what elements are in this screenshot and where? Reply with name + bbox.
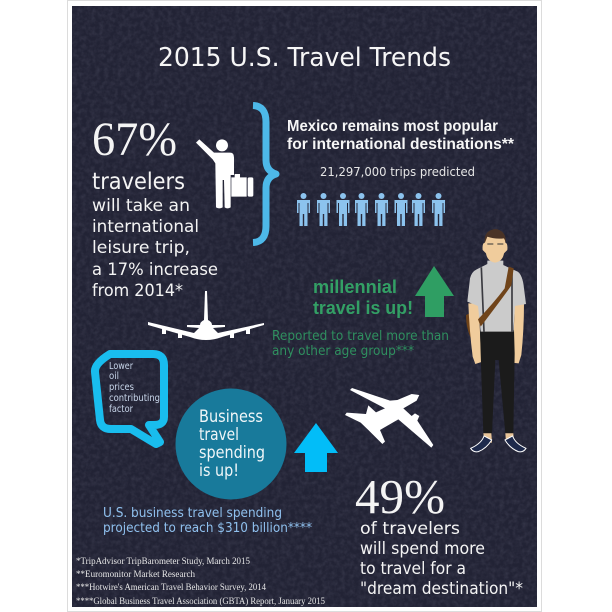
- bubble text: oil: [109, 371, 119, 382]
- footnotes: ****Global Business Travel Association (GBTA) Report, January 2015: [76, 596, 325, 607]
- footnotes: [76, 557, 325, 607]
- icon: traveler with suitcase: [196, 139, 253, 208]
- heading: Mexico: [287, 118, 515, 153]
- stat block: 49% of travelers: [355, 469, 523, 598]
- heading: Mexico: for international destinations**: [287, 136, 515, 153]
- heading: Mexico: Mexico remains most popular: [287, 118, 498, 135]
- stat block: 67% travelers: 67%: [92, 113, 177, 166]
- heading: millennial travel: travel is up!: [313, 298, 413, 318]
- stat block: 49% of travelers: of travelers: [360, 519, 460, 538]
- bubble text: prices: [109, 382, 134, 393]
- circle: business travel: is up!: [199, 461, 239, 481]
- circle: business travel: travel: [199, 425, 239, 445]
- stat block: 49% of travelers: will spend more: [360, 539, 485, 558]
- stat block: 67% travelers: international: [92, 217, 199, 237]
- stat block: 49% of travelers: to travel for a: [360, 559, 466, 578]
- footnotes: **Euromonitor Market Research: [76, 570, 195, 580]
- brace: [253, 106, 276, 242]
- icon: airplane front view: [148, 291, 264, 340]
- footnotes: *TripAdvisor TripBarometer Study, March 2015: [76, 557, 250, 567]
- pictogram: eight people: [297, 193, 445, 226]
- business travel note: projected to reach $310 billion****: [103, 521, 312, 536]
- circle: business travel: spending: [199, 443, 265, 463]
- page frame: [68, 0, 542, 612]
- business travel note: [103, 506, 312, 536]
- circle: business travel: Business: [199, 407, 263, 427]
- business travel note: U.S. business travel spending: [103, 506, 282, 521]
- arrow: blue up: [294, 423, 338, 472]
- bubble text: factor: [109, 404, 133, 415]
- stat block: 49% of travelers: "dream destination"*: [360, 579, 523, 598]
- title: 2015 U.S. Travel Trends: [158, 43, 451, 73]
- background panel: [72, 6, 537, 607]
- millennial note: Reported to travel more than: [272, 329, 449, 344]
- arrow: green up: [415, 266, 454, 317]
- stat block: 67% travelers: will take an: [92, 196, 190, 216]
- speech bubble: [95, 354, 164, 444]
- heading: millennial travel: millennial: [313, 277, 397, 297]
- heading: millennial travel: [313, 277, 413, 318]
- circle: business travel: [176, 388, 286, 500]
- millennial note: [272, 329, 449, 359]
- stat block: 67% travelers: travelers: [92, 169, 185, 195]
- millennial note: any other age group***: [272, 344, 414, 359]
- bubble text: Lower: [109, 361, 133, 372]
- bubble text: [109, 361, 160, 415]
- stat block: 49% of travelers: 49%: [355, 469, 445, 524]
- stat block: 67% travelers: leisure trip,: [92, 238, 190, 258]
- bubble text: contributing: [109, 393, 160, 404]
- stat block: 67% travelers: [92, 113, 218, 301]
- footnotes: ***Hotwire's American Travel Behavior Survey, 2014: [76, 583, 266, 593]
- stat block: 67% travelers: from 2014*: [92, 281, 183, 301]
- stat block: 67% travelers: a 17% increase: [92, 260, 218, 280]
- icon: airplane banking: [345, 388, 433, 448]
- illustration: young man: [466, 229, 526, 452]
- trips predicted: 21,297,000 trips predicted: [320, 164, 475, 179]
